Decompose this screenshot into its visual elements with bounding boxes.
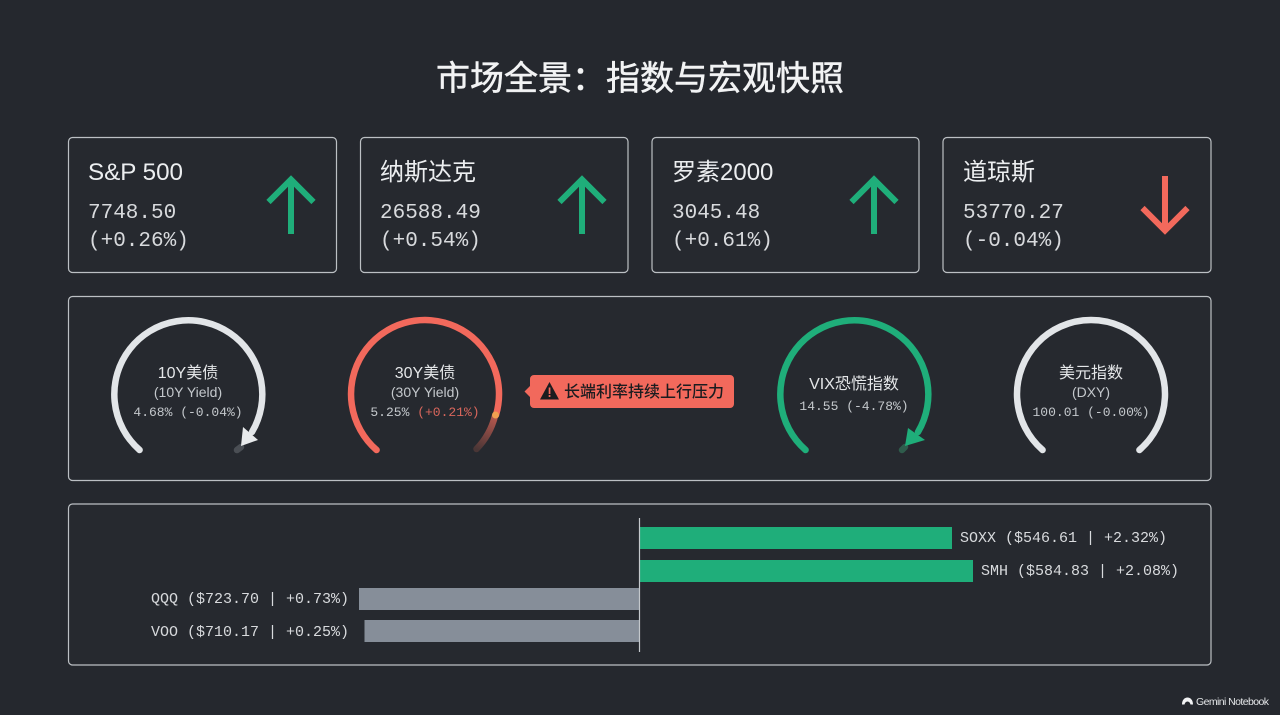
callout: long-end rate pressure: 长端利率持续上行压力 bbox=[564, 383, 724, 401]
footer: Gemini Notebook mark: Gemini Notebook bbox=[1196, 696, 1270, 708]
card name: 纳斯达克 bbox=[380, 159, 476, 186]
panel: S&P 500 card bbox=[68, 138, 336, 272]
panel: Dow Jones card bbox=[943, 138, 1211, 272]
card change: (-0.04%) bbox=[963, 230, 1064, 253]
card change: (+0.26%) bbox=[88, 230, 189, 253]
panel: Nasdaq card bbox=[360, 138, 628, 272]
callout: long-end rate pressure bbox=[524, 375, 734, 408]
card value: 26588.49 bbox=[380, 202, 481, 225]
gauge: dollar index: (DXY) bbox=[1072, 384, 1110, 400]
card name: 道琼斯 bbox=[963, 159, 1035, 186]
card value: 53770.27 bbox=[963, 202, 1064, 225]
bar: VOO bbox=[151, 620, 639, 642]
title: 市场全景：指数与宏观快照 bbox=[436, 60, 844, 98]
icon: down arrow bbox=[1142, 176, 1188, 230]
card name: 罗素2000 bbox=[672, 159, 773, 186]
gauge: 10Y yield: 10Y美债 bbox=[158, 364, 218, 382]
panel: macro gauges bbox=[68, 296, 1211, 480]
card value: 7748.50 bbox=[88, 202, 176, 225]
bar: VOO: VOO ($710.17 | +0.25%) bbox=[151, 624, 349, 641]
bar: SMH: SMH ($584.83 | +2.08%) bbox=[981, 563, 1179, 580]
gauge: VIX bbox=[780, 320, 928, 450]
gauge: 30Y yield bbox=[351, 320, 499, 450]
gauge: 30Y yield: (30Y Yield) bbox=[391, 384, 459, 400]
card value: 3045.48 bbox=[672, 202, 760, 225]
bar: QQQ: QQQ ($723.70 | +0.73%) bbox=[151, 591, 349, 608]
gauge: VIX: 14.55 (-4.78%) bbox=[799, 399, 909, 414]
gauge: dollar index: 美元指数 bbox=[1059, 364, 1123, 382]
gauge: 10Y yield bbox=[114, 320, 262, 450]
icon: up arrow bbox=[560, 180, 604, 234]
bar: QQQ bbox=[151, 588, 639, 610]
gauge: dollar index bbox=[1017, 320, 1165, 450]
icon: up arrow bbox=[852, 180, 896, 234]
gauge: 30Y yield: 30Y美债 bbox=[395, 364, 455, 382]
panel: Russell 2000 card bbox=[652, 138, 919, 272]
panel: ETF bar chart bbox=[68, 504, 1211, 665]
card change: (+0.54%) bbox=[380, 230, 481, 253]
bar: SMH bbox=[640, 560, 1179, 582]
card change: (+0.61%) bbox=[672, 230, 773, 253]
gauge: VIX: VIX恐慌指数 bbox=[809, 375, 899, 393]
gauge: 10Y yield: (10Y Yield) bbox=[154, 384, 222, 400]
bar: SOXX bbox=[640, 527, 1167, 549]
bar: SOXX: SOXX ($546.61 | +2.32%) bbox=[960, 530, 1167, 547]
gauge: 10Y yield: 4.68% (-0.04%) bbox=[133, 405, 243, 420]
card name: S&P 500 bbox=[88, 159, 183, 186]
gauge: 30Y yield: 5.25% (+0.21%) bbox=[370, 405, 480, 420]
gauge: dollar index: 100.01 (-0.00%) bbox=[1032, 405, 1150, 420]
icon: up arrow bbox=[268, 180, 314, 234]
